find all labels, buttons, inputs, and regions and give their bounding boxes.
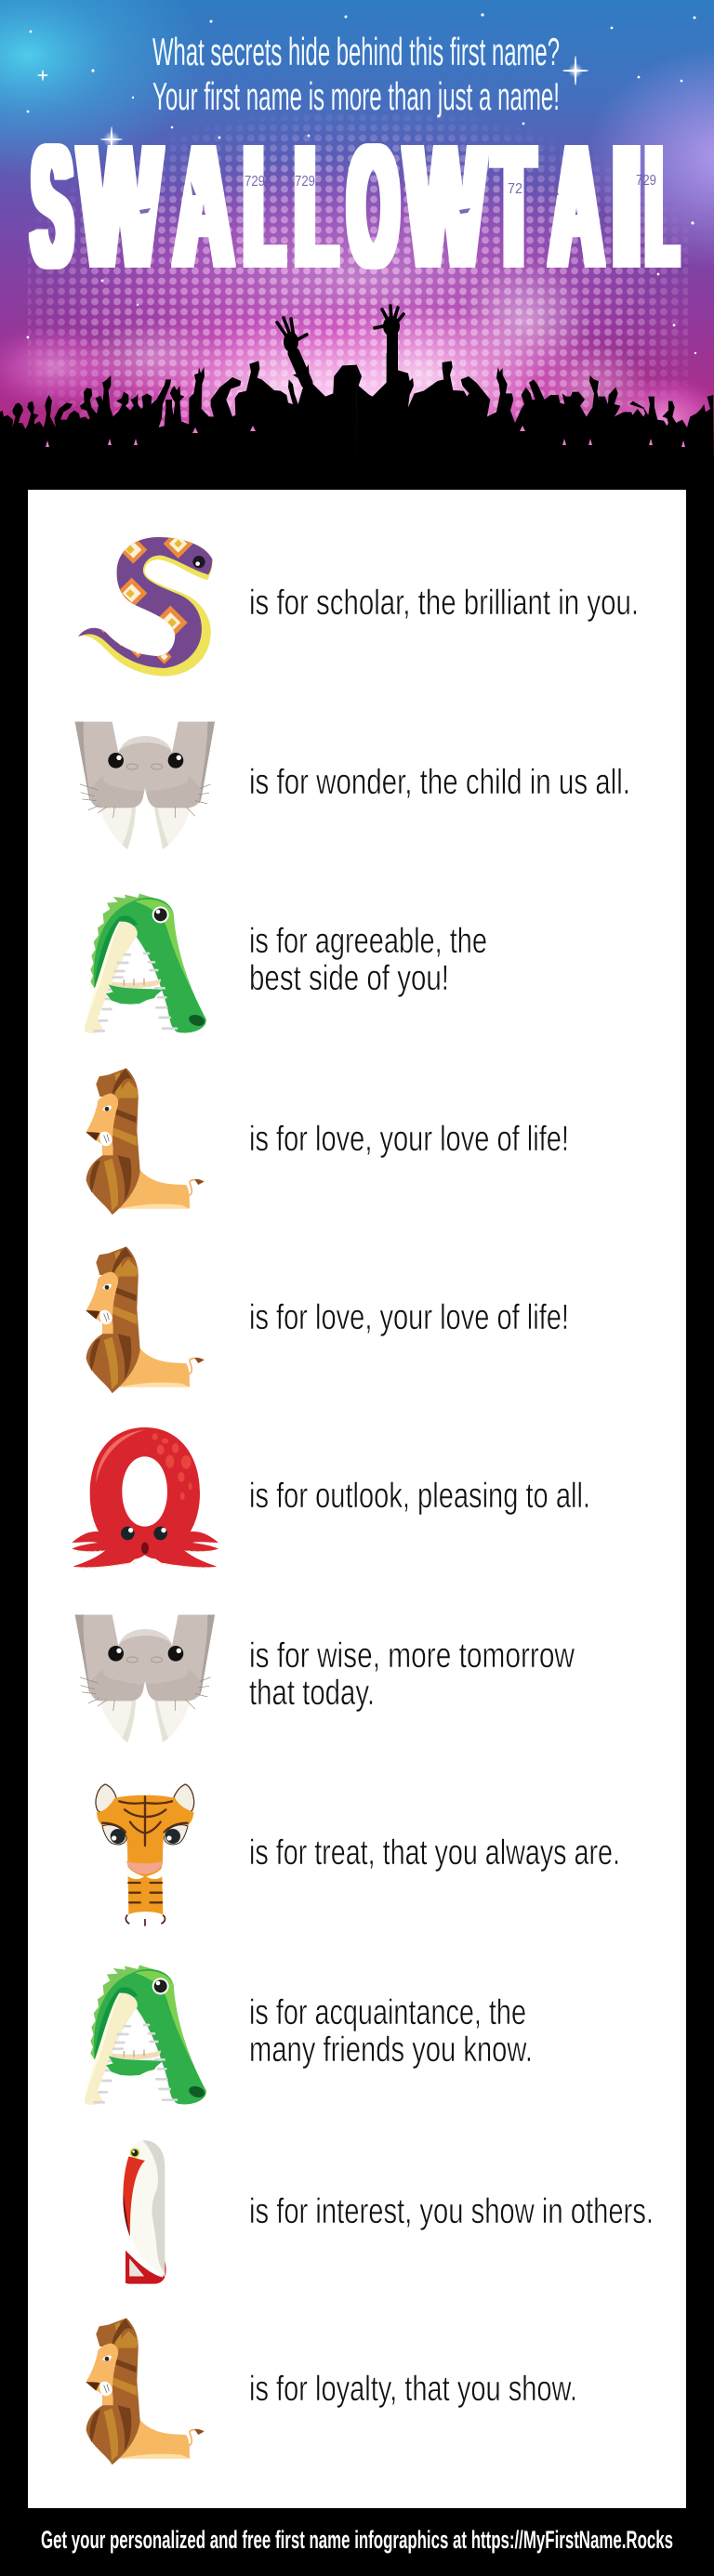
text: A row: best side of you! xyxy=(249,959,449,998)
text: L row: is for loyalty, that you show. xyxy=(249,2370,577,2409)
text: W row: that today. xyxy=(249,1674,375,1713)
title grunge marks: 729 xyxy=(295,174,315,190)
left half of audience xyxy=(0,361,357,465)
text: A row xyxy=(249,922,487,998)
text: O row: is for outlook, pleasing to all. xyxy=(249,1477,590,1516)
text: L row: is for love, your love of life! xyxy=(249,1298,569,1337)
title: SWALLOWTAIL: W xyxy=(80,111,160,303)
title: SWALLOWTAIL: L xyxy=(296,111,337,303)
small gaps between audience bodies xyxy=(46,426,685,447)
title grunge marks: 729 xyxy=(245,174,265,190)
icon: lion letter L xyxy=(86,1246,204,1393)
icon: lion letter L xyxy=(86,2318,204,2464)
icon: ibis letter I xyxy=(123,2140,166,2284)
panel: header stage background xyxy=(0,0,714,493)
icon: lion letter L xyxy=(86,1068,204,1215)
title: SWALLOWTAIL: L xyxy=(245,111,284,303)
solid black floor under audience xyxy=(0,455,714,491)
right half of audience xyxy=(357,353,714,465)
title: SWALLOWTAIL: S xyxy=(33,111,72,303)
crowd silhouette xyxy=(0,306,714,491)
title grunge marks xyxy=(139,173,656,214)
text: W row xyxy=(249,1636,575,1713)
title grunge marks: 729 xyxy=(636,173,656,189)
main figure raised arms and hands xyxy=(277,306,403,383)
icon: octopus letter O xyxy=(72,1427,218,1568)
icon: crocodile letter A xyxy=(85,1965,206,2105)
title: SWALLOWTAIL: W xyxy=(406,111,484,303)
subtitle text xyxy=(152,30,560,118)
text: A row: is for acquaintance, the xyxy=(249,1993,526,2032)
title: SWALLOWTAIL: A xyxy=(175,111,232,303)
icon: crocodile letter A xyxy=(85,894,206,1033)
title: SWALLOWTAIL xyxy=(33,111,677,303)
panel: white content card xyxy=(28,490,686,2508)
icon: tiger letter T xyxy=(96,1784,194,1926)
text: A row: many friends you know. xyxy=(249,2031,533,2070)
title: SWALLOWTAIL: A xyxy=(550,111,602,303)
icon: snake letter S xyxy=(78,529,212,677)
title: SWALLOWTAIL: O xyxy=(349,111,398,303)
icon: walrus letter W xyxy=(75,722,215,849)
text: A row: is for agreeable, the xyxy=(249,922,487,961)
text: L row: is for love, your love of life! xyxy=(249,1120,569,1159)
title: SWALLOWTAIL: T xyxy=(494,111,534,303)
icon: walrus letter W xyxy=(75,1615,215,1742)
text: A row xyxy=(249,1993,533,2070)
text: W row: is for wise, more tomorrow xyxy=(249,1636,575,1676)
title grunge marks: 72 xyxy=(508,181,522,197)
title: SWALLOWTAIL: I xyxy=(611,111,642,303)
